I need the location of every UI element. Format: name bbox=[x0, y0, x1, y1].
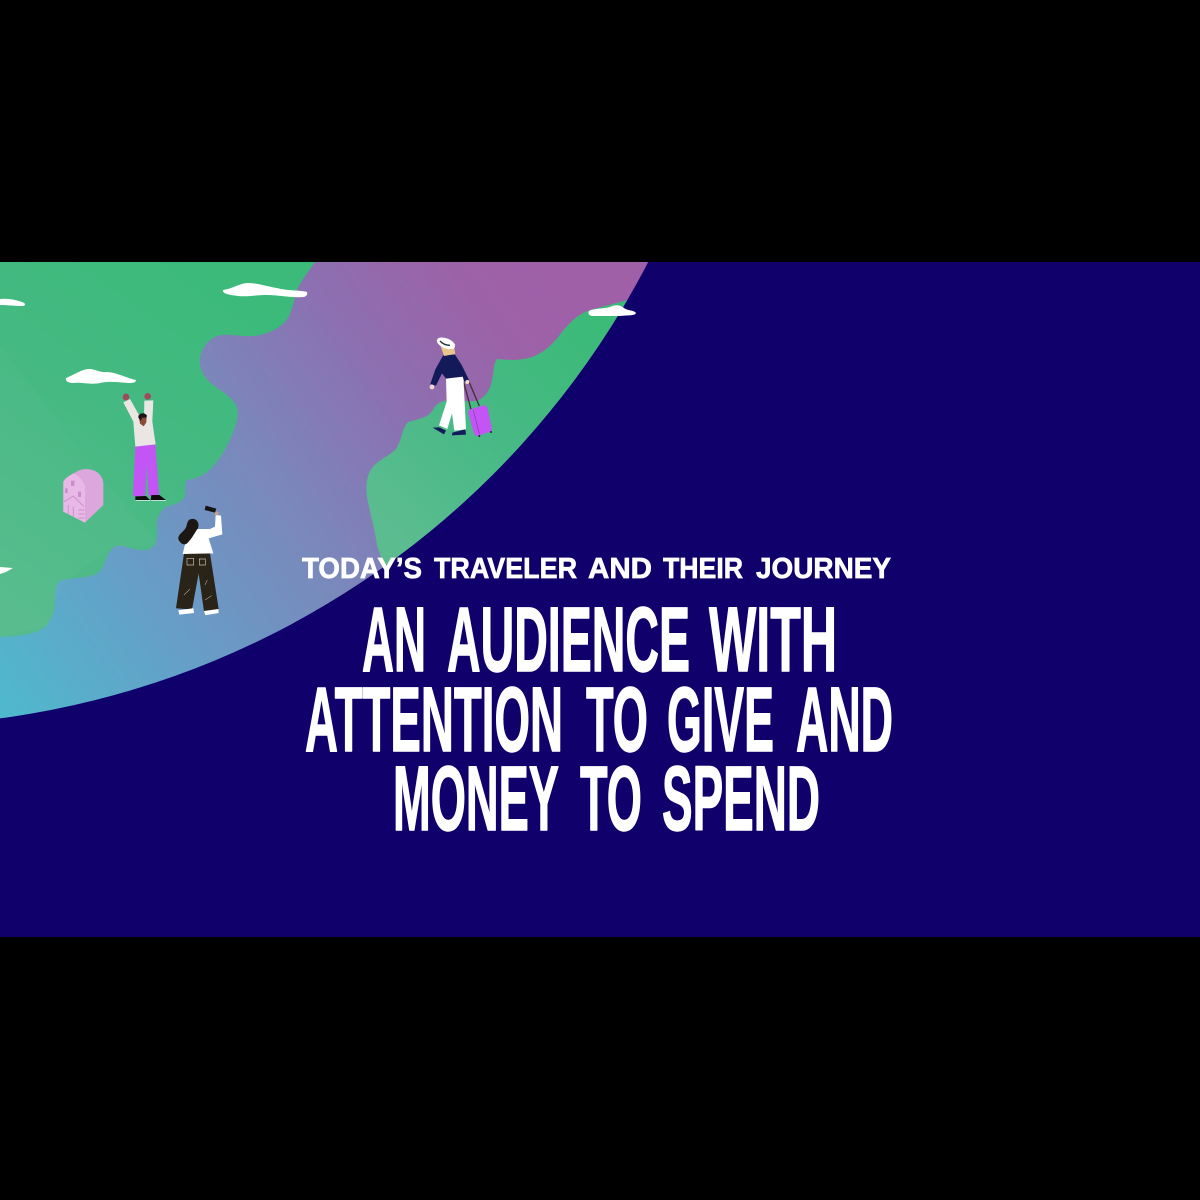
sweater bbox=[430, 355, 469, 386]
title: AN bbox=[362, 589, 426, 691]
phone and hand bbox=[215, 511, 219, 515]
suitcase handle bbox=[464, 381, 479, 409]
raised hands bbox=[123, 394, 129, 400]
subtitle: TRAVELER bbox=[434, 553, 577, 585]
subtitle bbox=[302, 553, 891, 585]
head bbox=[139, 415, 147, 426]
cloud top centre bbox=[223, 283, 307, 297]
figure: traveler with suitcase bbox=[430, 335, 492, 437]
subtitle: TODAY’S bbox=[302, 553, 422, 585]
cloud lower left bbox=[0, 567, 13, 574]
right landmass bbox=[366, 300, 628, 565]
subtitle: JOURNEY bbox=[756, 553, 891, 585]
globe sea bbox=[0, 262, 660, 732]
figure: woman taking a photo bbox=[176, 506, 222, 615]
title: AUDIENCE bbox=[447, 589, 690, 691]
shoes bbox=[178, 608, 219, 615]
trousers bbox=[439, 377, 466, 431]
shoes bbox=[135, 495, 166, 501]
hands bbox=[430, 385, 434, 389]
text: AND bbox=[796, 669, 893, 771]
cloud right edge bbox=[588, 305, 636, 316]
background panel bbox=[0, 262, 1200, 937]
title: MONEY bbox=[393, 748, 559, 850]
title: TO bbox=[586, 669, 648, 771]
title: GIVE bbox=[667, 669, 774, 771]
title: TO bbox=[580, 748, 642, 850]
figure: person with raised arms bbox=[123, 393, 166, 501]
trousers bbox=[133, 444, 159, 496]
title: WITH bbox=[709, 589, 837, 691]
land light streak bbox=[0, 345, 160, 637]
title bbox=[305, 589, 893, 850]
cloud above figure bbox=[66, 369, 136, 384]
subtitle: THEIR bbox=[663, 553, 743, 585]
cloud left edge bbox=[0, 299, 25, 306]
trousers bbox=[176, 553, 219, 612]
hair bbox=[178, 519, 199, 544]
globe illustration bbox=[0, 262, 690, 732]
shirt bbox=[183, 515, 222, 554]
sweater bbox=[123, 399, 156, 447]
title: SPEND bbox=[662, 748, 820, 850]
suitcase bbox=[468, 405, 492, 436]
icon: pink building bbox=[63, 469, 103, 523]
subtitle: AND bbox=[588, 553, 652, 585]
shoes bbox=[433, 427, 466, 435]
hair bbox=[441, 346, 455, 356]
title: ATTENTION bbox=[305, 669, 563, 771]
hat bbox=[435, 335, 457, 352]
left landmass bbox=[0, 262, 315, 637]
